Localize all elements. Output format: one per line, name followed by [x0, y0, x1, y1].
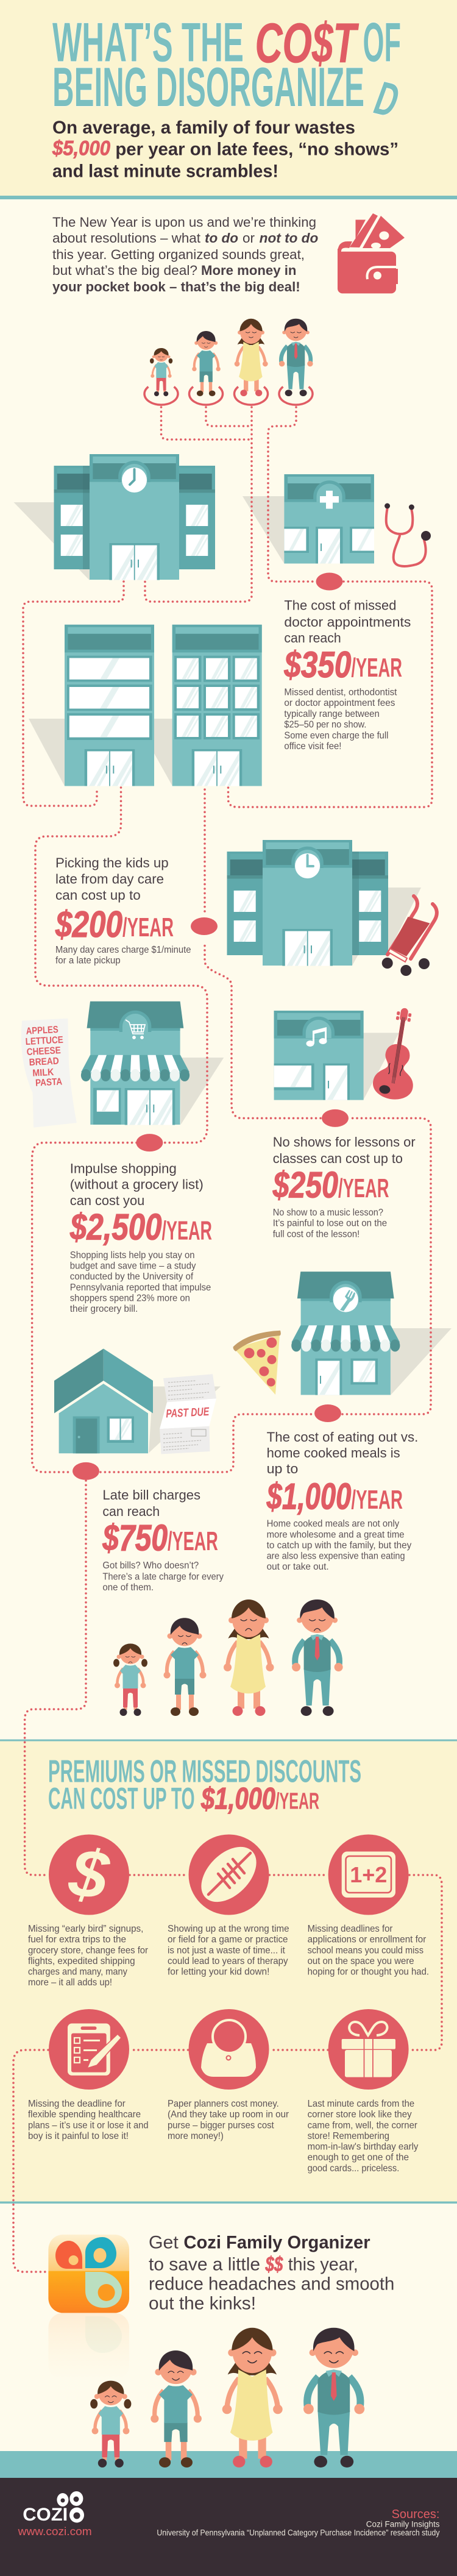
stop markers on the dotted path	[73, 573, 349, 1480]
icon: stroller	[382, 896, 437, 976]
shopping list paper: PASTA	[35, 1076, 63, 1089]
text: late bills: /YEAR	[168, 1526, 218, 1556]
text: doctor appointments: Missed dentist, orthodontist	[284, 687, 397, 697]
callout: get Cozi: out the kinks!	[149, 2293, 256, 2313]
building: school with clock	[54, 454, 215, 580]
text: eating out: out or take out.	[267, 1562, 329, 1572]
text: impulse shopping: Shopping lists help you stay on	[70, 1250, 195, 1261]
text: lessons no shows: No show to a music lesson?	[273, 1208, 383, 1218]
text: day care: /YEAR	[122, 913, 174, 942]
family: happy figures	[90, 2328, 364, 2467]
logo: cozi	[23, 2491, 84, 2525]
text: first row of premiums: out on the space you were	[308, 1956, 414, 1966]
text: second row of premiums: flexible spending healthcare	[28, 2110, 141, 2120]
icon: violin	[371, 1005, 425, 1102]
intro paragraph: your pocket book – that’s the big deal!	[52, 279, 300, 294]
text: day care: for a late pickup	[55, 956, 121, 966]
text: late bills: one of them.	[102, 1582, 154, 1593]
text: eating out: $1,000	[266, 1476, 351, 1517]
text: lessons no shows: full cost of the lesson!	[273, 1229, 360, 1240]
icon: Cozi app with reflection	[48, 2235, 129, 2380]
text: day care: can cost up to	[55, 888, 141, 903]
text: eating out: The cost of eating out vs.	[267, 1429, 418, 1445]
text: day care: late from day care	[55, 872, 164, 886]
intro paragraph: or	[243, 230, 255, 246]
callout: get Cozi: $$	[265, 2253, 283, 2276]
text: eating out	[266, 1429, 418, 1572]
icon: music note	[306, 1027, 327, 1047]
text: doctor appointments: can reach	[284, 630, 341, 646]
family start rings	[144, 386, 313, 405]
icon: pizza slice	[233, 1331, 281, 1395]
text: first row of premiums: Missing deadlines for	[308, 1924, 393, 1934]
subtitle	[52, 118, 399, 182]
text: day care: $200	[55, 904, 122, 945]
building: music school	[274, 1011, 364, 1100]
heading: premiums: /YEAR	[275, 1788, 319, 1814]
building: grocery store	[81, 1002, 190, 1125]
heading: premiums	[48, 1754, 361, 1815]
family: calm top figures	[150, 319, 313, 396]
text: second row of premiums: Last minute cards from the	[308, 2099, 414, 2109]
text: doctor appointments: $25–50 per no show.	[284, 719, 366, 730]
building: office with wide windows	[65, 625, 154, 786]
icon circle: checklist and pencil	[49, 2009, 129, 2090]
callout: get Cozi	[149, 2233, 394, 2313]
text: lessons no shows: $250	[272, 1164, 338, 1206]
shadow shapes behind buildings	[13, 496, 452, 1453]
text: late bills: can reach	[102, 1504, 160, 1519]
text: day care	[55, 855, 191, 966]
text: eating out: home cooked meals is	[267, 1445, 400, 1461]
family: sad figures	[113, 1599, 343, 1716]
text: second row of premiums: mom-in-law's birthday early	[308, 2142, 418, 2152]
callout: get Cozi: Cozi Family Organizer	[183, 2233, 370, 2253]
website url: www.cozi.com	[18, 2525, 92, 2538]
text: first row of premiums: grocery store, change fees for	[28, 1945, 149, 1955]
text: eating out: up to	[267, 1461, 298, 1476]
text: second row of premiums: (And they take up room in our	[168, 2110, 289, 2120]
shopping list paper: MILK	[32, 1067, 54, 1079]
subtitle: per year on late fees, “no shows”	[115, 139, 399, 160]
text: first row of premiums: fuel for extra trips to the	[28, 1935, 126, 1945]
building: house	[54, 1348, 153, 1453]
callout: get Cozi: this year,	[288, 2254, 358, 2275]
text: lessons no shows: No shows for lessons or	[273, 1134, 416, 1150]
text: second row of premiums: purse – bigger purses cost	[168, 2120, 274, 2130]
icon circle: dollar sign	[49, 1834, 129, 1915]
text: impulse shopping: Impulse shopping	[70, 1161, 177, 1176]
heading: premiums: CAN COST UP TO	[48, 1781, 195, 1815]
icon circle: football	[189, 1835, 269, 1915]
building: restaurant	[291, 1272, 400, 1395]
intro paragraph	[52, 215, 318, 294]
text: doctor appointments	[284, 598, 411, 752]
text: late bills: $750	[102, 1518, 168, 1558]
icon: shopping cart	[126, 1020, 145, 1039]
callout: get Cozi: to save a little	[149, 2254, 260, 2275]
shopping list paper: CHEESE	[26, 1045, 61, 1058]
text: second row of premiums: more money!)	[168, 2131, 224, 2141]
text: eating out: /YEAR	[351, 1485, 403, 1515]
text: lessons no shows: It’s painful to lose out on the	[273, 1219, 387, 1229]
text: impulse shopping: their grocery bill.	[70, 1304, 138, 1314]
intro paragraph: not to do	[260, 230, 318, 246]
text: first row of premiums: school means you could miss	[308, 1945, 423, 1955]
text: late bills: There’s a late charge for every	[102, 1571, 224, 1582]
callout: get Cozi: reduce headaches and smooth	[149, 2274, 394, 2294]
title: D	[367, 71, 406, 127]
text: doctor appointments: /YEAR	[351, 653, 402, 683]
intro paragraph: More money in	[201, 263, 296, 278]
text: eating out: Home cooked meals are not only	[267, 1519, 399, 1529]
text: late bills: Got bills? Who doesn’t?	[102, 1560, 199, 1571]
text: first row of premiums: applications or enrollment for	[308, 1935, 427, 1945]
building: medical clinic	[284, 474, 374, 563]
text: impulse shopping: $2,500	[69, 1206, 162, 1247]
text: second row of premiums: plans – it’s use it or lose it and	[28, 2120, 149, 2130]
text: lessons no shows: /YEAR	[338, 1173, 389, 1203]
shopping list paper: BREAD	[29, 1056, 59, 1068]
subtitle: $5,000	[52, 137, 110, 160]
text: second row of premiums: good cards... priceless.	[308, 2163, 399, 2174]
text: impulse shopping: (without a grocery list)	[70, 1176, 204, 1192]
text: impulse shopping: shoppers spend 23% more on	[70, 1293, 190, 1303]
text: second row of premiums: Paper planners cost money.	[168, 2099, 279, 2109]
text: first row of premiums: or field for a game or practice	[168, 1935, 288, 1945]
icon circle: 1+2: 1+2	[350, 1862, 387, 1887]
text: doctor appointments: Some even charge the full	[284, 730, 388, 741]
text: impulse shopping: Pennsylvania reported that impulse	[70, 1283, 211, 1293]
shopping list paper	[21, 1019, 77, 1128]
icon circle: purse	[189, 2009, 269, 2090]
text: impulse shopping	[69, 1161, 212, 1314]
title: CO$T	[255, 12, 359, 74]
text: first row of premiums: charges and many, many	[28, 1967, 127, 1977]
text: day care: Many day cares charge $1/minute	[55, 945, 191, 955]
dotted path connecting all stops	[13, 407, 442, 2272]
text: eating out: to catch up with the family, but they	[267, 1540, 411, 1551]
intro paragraph: this year. Getting organized sounds great,	[52, 247, 305, 262]
text: first row of premiums: Showing up at the wrong time	[168, 1924, 289, 1934]
intro paragraph: about resolutions – what	[52, 230, 200, 246]
text: late bills	[102, 1487, 224, 1593]
text: first row of premiums: Missing “early bird” signups,	[28, 1924, 143, 1934]
shopping list paper: APPLES	[26, 1025, 58, 1037]
text: doctor appointments: office visit fee!	[284, 741, 341, 752]
intro paragraph: but what’s the big deal?	[52, 263, 197, 278]
text: first row of premiums: could lead to years of therapy	[168, 1956, 288, 1966]
heading: premiums: $1,000	[200, 1781, 275, 1815]
text: doctor appointments: typically range between	[284, 709, 380, 719]
title: WHAT’S THE	[52, 12, 244, 74]
text: second row of premiums: enough to get one of the	[308, 2152, 409, 2163]
text: first row of premiums: for letting your kid down!	[168, 1967, 269, 1977]
logo: cozi: COZI	[23, 2505, 68, 2525]
icon circle: dollar sign: $	[65, 1834, 114, 1915]
title: OF	[363, 12, 401, 74]
text: first row of premiums: is not just a waste of time... it	[168, 1945, 285, 1955]
sources: Cozi Family Insights	[366, 2519, 440, 2528]
icon: past due bill: PAST DUE	[166, 1406, 210, 1420]
sources: Sources:	[392, 2508, 440, 2521]
text: lessons no shows: classes can cost up to	[273, 1151, 403, 1166]
text: impulse shopping: /YEAR	[162, 1215, 212, 1245]
icon: wallet with cash	[338, 213, 405, 293]
text: impulse shopping: budget and save time – a study	[70, 1261, 196, 1272]
icon circle: gift	[328, 2009, 409, 2090]
text: second row of premiums: store! Remembering	[308, 2131, 389, 2141]
text: eating out: are also less expensive than eating	[267, 1551, 405, 1562]
text: second row of premiums	[28, 2099, 418, 2174]
icon: stethoscope	[384, 503, 431, 566]
text: second row of premiums: corner store look like they	[308, 2110, 412, 2120]
text: doctor appointments: doctor appointments	[284, 614, 411, 630]
text: doctor appointments: The cost of missed	[284, 598, 396, 613]
intro paragraph: The New Year is upon us and we’re thinking	[52, 215, 316, 230]
text: second row of premiums: came from, well, the corner	[308, 2120, 418, 2130]
text: doctor appointments: $350	[284, 644, 351, 685]
building: office with grid windows	[172, 625, 262, 786]
text: late bills: Late bill charges	[102, 1487, 200, 1503]
text: impulse shopping: can cost you	[70, 1193, 144, 1208]
shopping list paper: LETTUCE	[25, 1035, 63, 1047]
intro paragraph: to do	[205, 230, 238, 246]
text: second row of premiums: boy is it painful to lose it!	[28, 2131, 129, 2141]
icon circle: 1+2	[328, 1835, 409, 1915]
text: first row of premiums: flights, expedited shipping	[28, 1956, 135, 1966]
text: eating out: more wholesome and a great time	[267, 1529, 405, 1540]
sources	[157, 2508, 440, 2538]
building: day care with clock	[227, 840, 388, 966]
text: doctor appointments: or doctor appointment fees	[284, 698, 395, 708]
text: impulse shopping: conducted by the University of	[70, 1272, 194, 1282]
text: first row of premiums: hoping for or thought you had.	[308, 1967, 429, 1977]
subtitle: On average, a family of four wastes	[52, 118, 355, 138]
text: first row of premiums	[28, 1924, 429, 1988]
icon: fork	[340, 1290, 355, 1311]
callout: get Cozi: Get	[149, 2233, 179, 2253]
title	[52, 12, 406, 127]
icon: past due bill	[160, 1374, 216, 1454]
subtitle: and last minute scrambles!	[52, 161, 278, 182]
text: day care: Picking the kids up	[55, 855, 169, 870]
text: first row of premiums: more – it all adds up!	[28, 1977, 112, 1988]
text: second row of premiums: Missing the deadline for	[28, 2099, 126, 2109]
text: lessons no shows	[272, 1134, 416, 1240]
